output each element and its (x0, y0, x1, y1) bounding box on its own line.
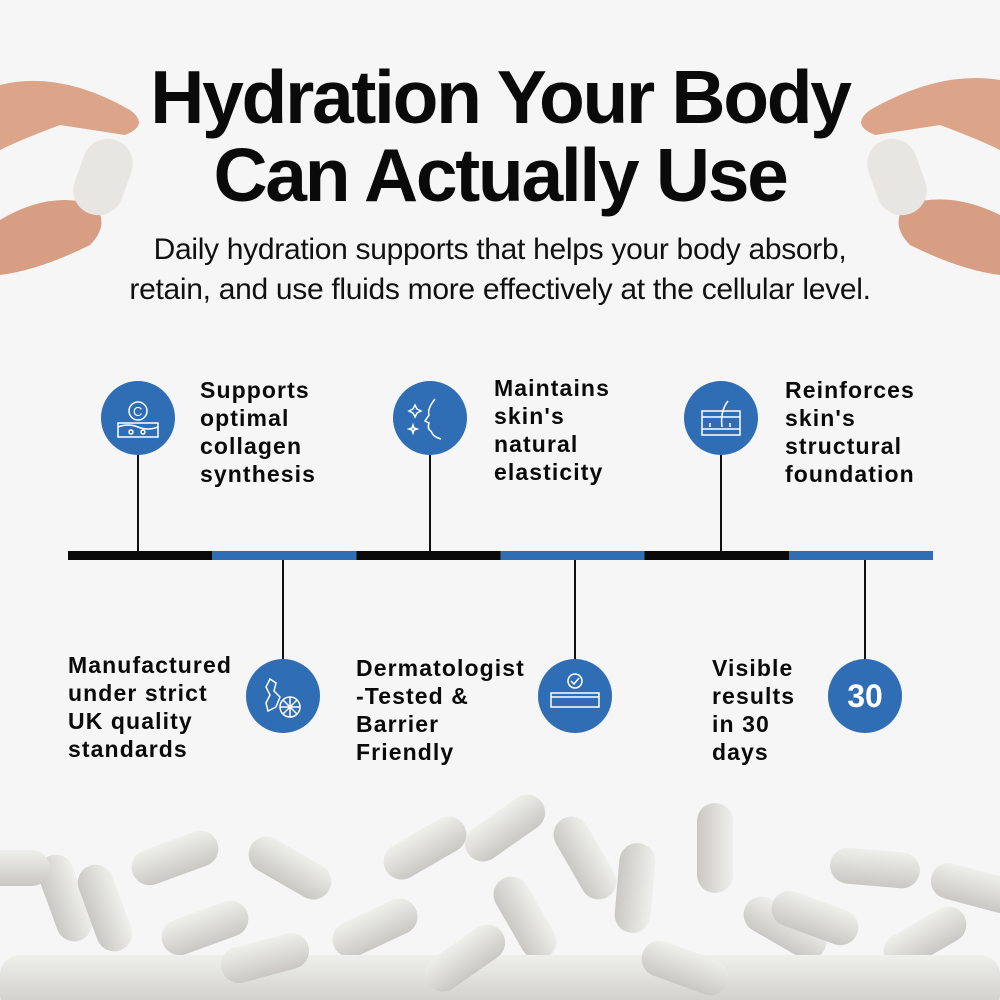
text: UK (68, 652, 232, 762)
title: Can Actually Use (213, 133, 787, 217)
icon: skin layers (684, 381, 758, 455)
subtitle: retain, and use fluids more effectively at the cellular level. (129, 273, 871, 306)
title: Hydration Your Body (150, 55, 850, 139)
text: structure: structural (785, 433, 902, 459)
icon: UK (246, 659, 320, 733)
text: collagen: optimal (200, 405, 289, 431)
text: 30 days: in 30 (712, 711, 770, 737)
text: 30 days: Visible (712, 655, 793, 681)
text: elasticity: Maintains (494, 375, 610, 401)
text: UK: under strict (68, 680, 208, 706)
text: collagen: Supports (200, 377, 310, 403)
icon: 30: 30 (847, 678, 883, 714)
subtitle: Daily hydration supports that helps your body absorb, (154, 233, 846, 266)
text: elasticity (494, 375, 610, 485)
icon: barrier (538, 659, 612, 733)
text: structure: skin's (785, 405, 856, 431)
text: dermatologist: Friendly (356, 739, 454, 765)
text: elasticity: natural (494, 431, 578, 457)
text: structure (785, 377, 915, 487)
text: structure: Reinforces (785, 377, 915, 403)
text: collagen (200, 377, 316, 487)
text: dermatologist: Barrier (356, 711, 439, 737)
text: elasticity: skin's (494, 403, 565, 429)
text: UK: UK quality (68, 708, 193, 734)
subtitle (129, 233, 871, 306)
text: elasticity: elasticity (494, 459, 603, 485)
text: structure: foundation (785, 461, 915, 487)
text: dermatologist: Dermatologist (356, 655, 525, 681)
decorative pills (0, 794, 1000, 1000)
icon: face (393, 381, 467, 455)
text: UK: Manufactured (68, 652, 232, 678)
text: collagen: collagen (200, 433, 302, 459)
text: UK: standards (68, 736, 188, 762)
icon: 30 (828, 659, 902, 733)
text: 30 days: days (712, 739, 769, 765)
icon: right hand (860, 78, 1000, 275)
text: dermatologist (356, 655, 525, 765)
text: collagen: synthesis (200, 461, 316, 487)
text: 30 days (712, 655, 795, 765)
title (150, 55, 852, 217)
text: 30 days: results (712, 683, 795, 709)
text: dermatologist: -Tested & (356, 683, 469, 709)
icon: collagen: C (133, 404, 142, 419)
icon: collagen (101, 381, 175, 455)
decorative hands with capsules (0, 78, 1000, 275)
icon: left hand (0, 81, 140, 275)
timeline bar (68, 551, 933, 560)
